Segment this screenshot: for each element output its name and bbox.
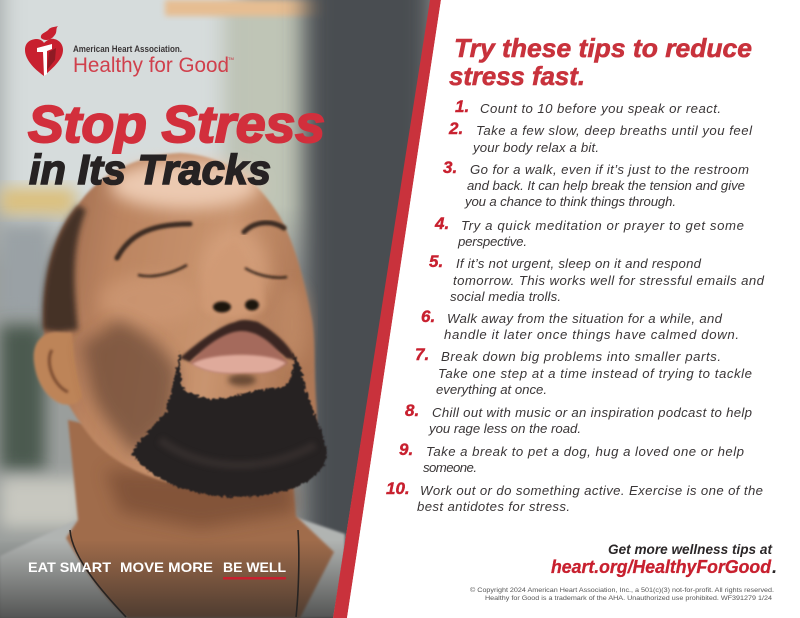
title [28, 96, 325, 193]
tip 5 [429, 252, 765, 304]
title line: in Its Tracks: in Its Tracks [29, 146, 271, 193]
tip 8: Chill out with music or an inspiration podcast to help [432, 405, 752, 420]
eyes closed [138, 265, 187, 276]
tip 1: Count to 10 before you speak or react. [480, 101, 721, 116]
American Heart Association: American Heart Association. [73, 44, 182, 54]
tagline: eat smart move more be well: BE WELL [223, 559, 286, 575]
shirt [0, 516, 345, 618]
neck [66, 420, 334, 618]
tagline: eat smart move more be well: EAT SMART [28, 559, 111, 575]
tip 3: 3. [443, 158, 457, 177]
tip 3 [443, 158, 749, 209]
red diagonal stripe [333, 0, 441, 618]
tip 6: Walk away from the situation for a while, and [447, 311, 723, 326]
stubble [82, 320, 178, 455]
heading: try these tips: Try these tips to reduce [454, 33, 752, 63]
trademark: TM [228, 56, 234, 61]
heading: try these tips: stress fast. [449, 61, 585, 91]
copyright: © Copyright 2024 American Heart Association, Inc., a 501(c)(3) not-for-profit. All rights reserved. [470, 587, 774, 594]
tip 2: your body relax a bit. [472, 140, 599, 155]
panel: photo of man breathing [0, 0, 432, 618]
tip 10 [386, 479, 763, 514]
moustache [180, 320, 296, 362]
tip 9: 9. [399, 440, 413, 459]
tip 5: If it’s not urgent, sleep on it and respond [456, 256, 702, 271]
tip 3: and back. It can help break the tension and give [467, 178, 745, 193]
call to action line: Get more wellness tips at [608, 542, 772, 557]
tip 3: Go for a walk, even if it’s just to the restroom [470, 162, 749, 177]
tip 4: perspective. [457, 234, 527, 249]
tip 6 [421, 307, 739, 342]
soul patch [228, 374, 256, 386]
blurred street background [0, 0, 432, 618]
tip 5: 5. [429, 252, 443, 271]
tip 6: 6. [421, 307, 435, 326]
url: heart.org/HealthyForGood [551, 556, 772, 577]
heading: try these tips [449, 33, 752, 91]
tip 5: tomorrow. This works well for stressful emails and [453, 273, 765, 288]
title line: Stop Stress: Stop Stress [28, 96, 325, 154]
tips list [386, 97, 765, 514]
tip 7: 7. [415, 345, 429, 364]
tip 10: Work out or do something active. Exercise is one of the [420, 483, 763, 498]
tip 9: someone. [423, 460, 477, 475]
beard [132, 352, 327, 497]
tip 7: Break down big problems into smaller parts. [441, 349, 721, 364]
tip 1: 1. [455, 97, 469, 116]
tip 10: 10. [386, 479, 410, 498]
eyebrows [117, 224, 190, 258]
tip 8: 8. [405, 401, 419, 420]
ear [34, 332, 82, 405]
tip 7: Take one step at a time instead of trying to tackle [438, 366, 752, 381]
tip 4: Try a quick meditation or prayer to get some [461, 218, 744, 233]
logo: American Heart Association Healthy for Good [25, 26, 234, 77]
tip 2 [448, 119, 753, 155]
tip 8 [405, 401, 752, 436]
tip 9: Take a break to pet a dog, hug a loved one or help [426, 444, 744, 459]
copyright [470, 587, 774, 602]
forehead highlight [110, 161, 260, 209]
call to action [551, 542, 777, 577]
tip 9 [399, 440, 744, 475]
tip 2: Take a few slow, deep breaths until you feel [476, 123, 753, 138]
necklace [70, 530, 126, 617]
tip 7 [415, 345, 752, 397]
lips [190, 331, 288, 373]
url period: . [772, 556, 777, 577]
tip 4: 4. [434, 214, 449, 233]
tagline: eat smart move more be well: MOVE MORE [120, 559, 213, 575]
tagline: eat smart move more be well [28, 559, 286, 580]
Healthy for Good: Healthy for Good [73, 54, 229, 77]
tip 3: you a chance to think things through. [464, 194, 676, 209]
nose [240, 298, 264, 320]
bottom fade [0, 547, 344, 618]
head [44, 153, 317, 492]
tip 2: 2. [448, 119, 463, 138]
copyright: Healthy for Good is a trademark of the AHA. Unauthorized use prohibited. WF391279 1/24 [485, 596, 773, 602]
hair [43, 205, 86, 332]
tip 10: best antidotes for stress. [417, 499, 570, 514]
white panel [347, 0, 800, 618]
tip 4 [434, 214, 744, 249]
icon: heart and torch [25, 26, 63, 76]
tip 7: everything at once. [436, 382, 547, 397]
tip 6: handle it later once things have calmed down. [444, 327, 739, 342]
tip 8: you rage less on the road. [428, 421, 581, 436]
tip 5: social media trolls. [450, 289, 561, 304]
